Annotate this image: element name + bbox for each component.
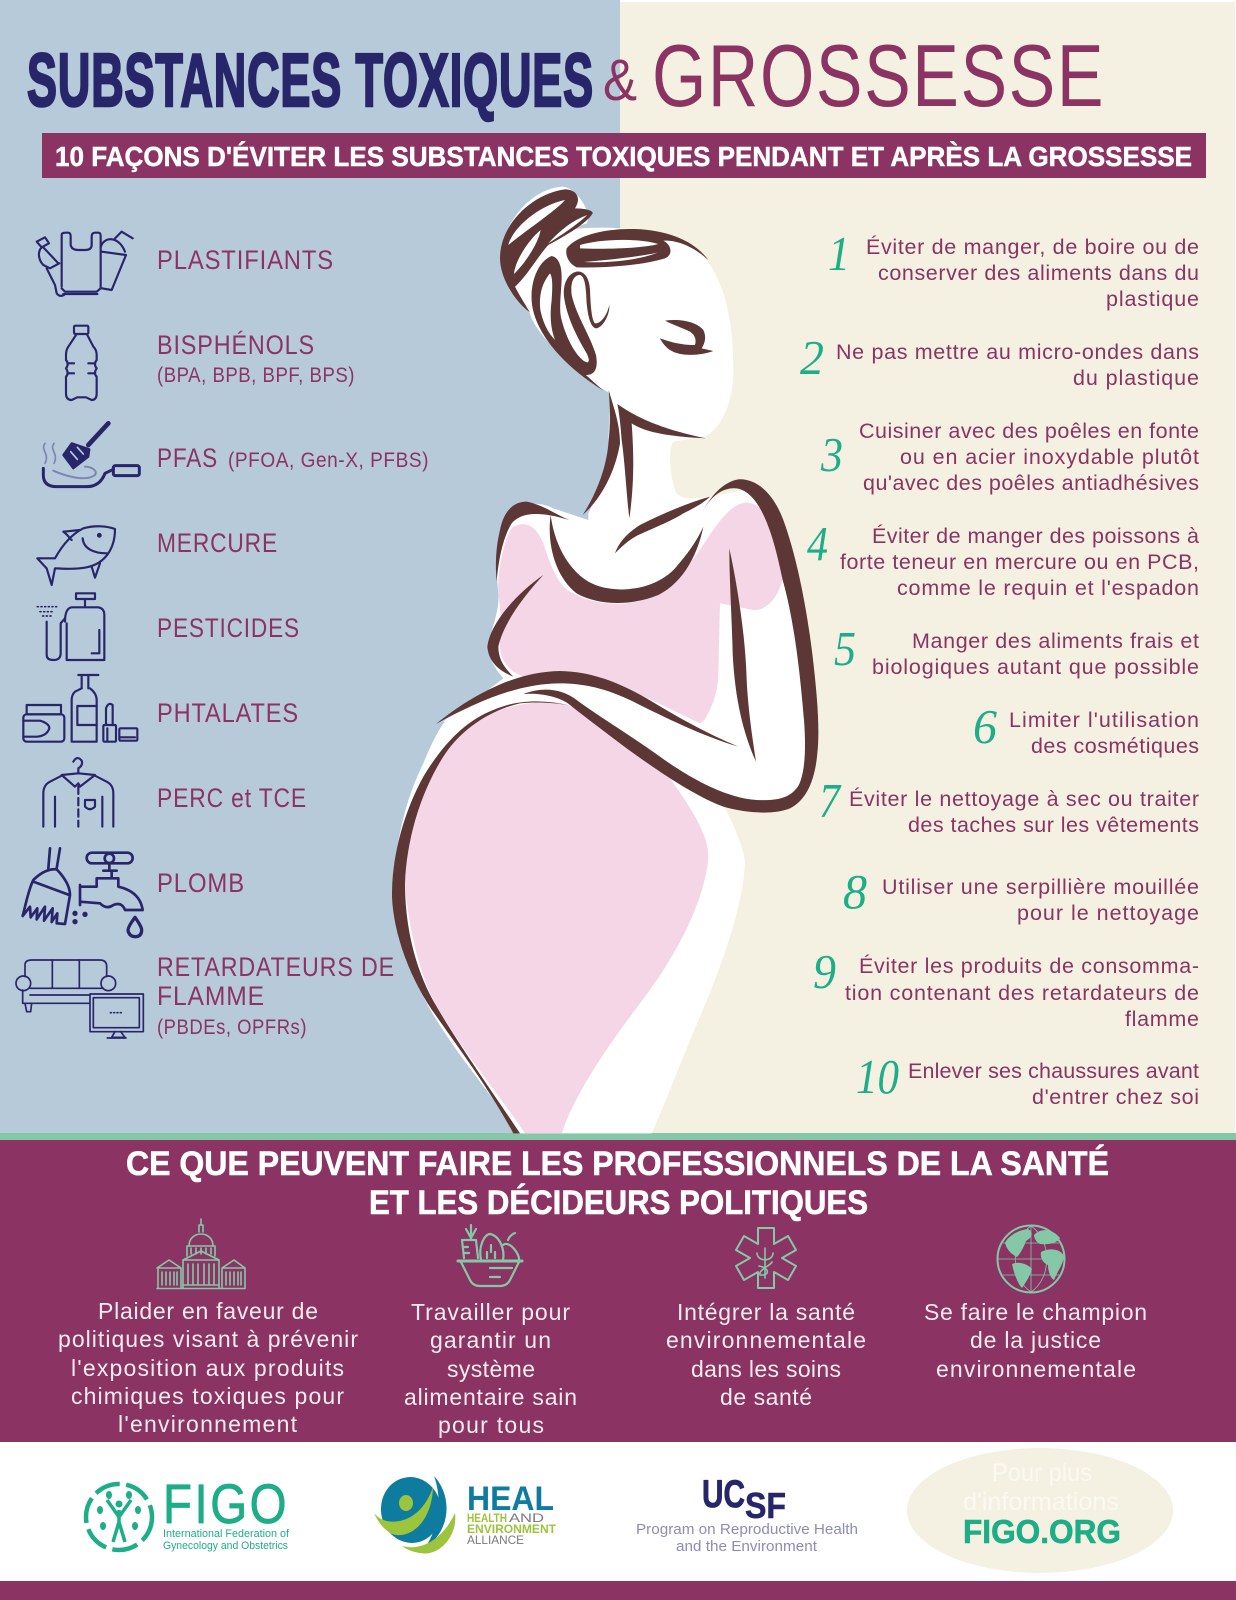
text: advocacy: l'environnement (118, 1411, 298, 1437)
callout: more information (907, 1448, 1173, 1573)
logo: ucsf: SF (745, 1485, 786, 1526)
text: advocacy: chimiques toxiques pour (71, 1383, 344, 1409)
logo: heal: HEAL (467, 1480, 554, 1518)
tip 7 (819, 773, 1199, 837)
list of toxic substances (16, 232, 429, 1039)
substance: bisphénols: (BPA, BPB, BPF, BPS) (157, 364, 355, 387)
text: food system: pour tous (438, 1412, 544, 1438)
text: integrate: de santé (720, 1384, 812, 1410)
action: advocacy (58, 1219, 358, 1437)
tip 6 (973, 699, 1199, 758)
tip 10: d'entrer chez soi (1032, 1085, 1199, 1109)
substance: retardateurs de flamme: (PBDEs, OPFRs) (157, 1016, 307, 1039)
substance: retardateurs de flamme: FLAMME (157, 981, 265, 1011)
tip 7: Éviter le nettoyage à sec ou traiter (849, 786, 1199, 811)
tip 2: 2 (800, 330, 824, 385)
text: integrate: dans les soins (691, 1356, 841, 1382)
logo: heal: HEALTH (467, 1511, 507, 1525)
tip 6: Limiter l'utilisation (1009, 708, 1199, 732)
text: justice: environnementale (936, 1356, 1136, 1382)
substance: phtalates: PHTALATES (157, 698, 299, 728)
substance: bisphénols: BISPHÉNOLS (157, 330, 315, 360)
callout: more information: FIGO.ORG (963, 1513, 1121, 1550)
substance: retardateurs de flamme (16, 952, 395, 1039)
icon: globe (998, 1226, 1064, 1292)
substance: perc et tce: PERC et TCE (157, 783, 307, 813)
substance: plomb: PLOMB (157, 868, 245, 898)
tip 3: qu'avec des poêles antiadhésives (863, 471, 1199, 495)
tip 1: 1 (828, 226, 850, 281)
substance: mercure (37, 526, 278, 585)
tip 7: des taches sur les vêtements (908, 813, 1199, 837)
tip 5: Manger des aliments frais et (912, 629, 1199, 653)
tip 5: biologiques autant que possible (872, 655, 1199, 679)
tip 10 (856, 1049, 1199, 1109)
text: justice: de la justice (970, 1327, 1101, 1353)
logo: figo: International Federation of (163, 1528, 290, 1540)
subtitle banner (42, 133, 1206, 178)
text: food system: garantir un (430, 1327, 551, 1353)
heading: health professionals and policy makers (126, 1145, 1109, 1222)
tip 1 (828, 226, 1199, 311)
logo: heal: ENVIRONMENT (467, 1522, 557, 1536)
tip 2: Ne pas mettre au micro-ondes dans (836, 340, 1199, 364)
list of 10 tips (800, 226, 1199, 1109)
text: integrate: Intégrer la santé (677, 1299, 855, 1325)
icon: food bowl (458, 1225, 522, 1286)
tip 8: 8 (843, 864, 867, 919)
tip 3: Cuisiner avec des poêles en fonte (859, 419, 1199, 443)
logo: ucsf: and the Environment (676, 1538, 818, 1555)
text: advocacy: l'exposition aux produits (71, 1355, 344, 1381)
tip 3: ou en acier inoxydable plutôt (900, 445, 1199, 469)
tip 9: Éviter les produits de consomma- (859, 953, 1199, 978)
tip 8: Utiliser une serpillière mouillée (882, 875, 1199, 899)
tip 10: 10 (856, 1049, 899, 1104)
tip 9: tion contenant des retardateurs de (845, 981, 1199, 1005)
tip 4: forte teneur en mercure ou en PCB, (840, 550, 1199, 574)
substance: bisphénols (66, 326, 355, 400)
logo: figo (86, 1472, 290, 1552)
text: justice: Se faire le champion (924, 1299, 1147, 1325)
icon: capitol building (157, 1219, 245, 1288)
tip 8: pour le nettoyage (1017, 901, 1199, 925)
logo: heal: AND (509, 1511, 544, 1525)
substance: perc et tce (43, 758, 307, 827)
text: food system (404, 1299, 577, 1438)
tip 3: 3 (820, 427, 843, 482)
tip 4 (807, 516, 1199, 600)
title: GROSSESSE (652, 26, 1105, 125)
text: advocacy: Plaider en faveur de (98, 1298, 318, 1324)
action: environmental justice (924, 1226, 1147, 1382)
tip 2 (800, 330, 1199, 390)
icon: star of life (736, 1228, 796, 1288)
text: advocacy: politiques visant à prévenir (58, 1326, 358, 1352)
tip 9: flamme (1125, 1007, 1199, 1031)
substance: phtalates (23, 675, 299, 742)
substance: plomb (23, 848, 245, 937)
tip 7: 7 (819, 773, 842, 828)
heading: health professionals and policy makers: ET LES DÉCIDEURS POLITIQUES (369, 1184, 868, 1222)
logo: figo: FIGO (163, 1472, 289, 1535)
text: food system: alimentaire sain (404, 1384, 577, 1410)
tip 6: des cosmétiques (1031, 734, 1199, 758)
tip 3 (820, 419, 1199, 495)
text: advocacy (58, 1298, 358, 1437)
action: integrate environmental health (666, 1228, 866, 1410)
tip 4: Éviter de manger des poissons à (872, 523, 1199, 548)
text: integrate: environnementale (666, 1327, 866, 1353)
logo: heal: ALLIANCE (467, 1533, 524, 1547)
tip 8 (843, 864, 1199, 925)
substance: pfas: (PFOA, Gen-X, PFBS) (228, 449, 429, 472)
text: food system: système (447, 1356, 535, 1382)
tip 9: 9 (813, 944, 836, 999)
logo: figo: Gynecology and Obstetrics (163, 1540, 288, 1552)
substance: pesticides: PESTICIDES (157, 613, 300, 643)
substance: pfas (43, 423, 429, 487)
tip 4: 4 (807, 516, 828, 571)
tip 10: Enlever ses chaussures avant (908, 1059, 1199, 1083)
text: integrate (666, 1299, 866, 1410)
tip 9 (813, 944, 1199, 1031)
action: healthy food system (404, 1225, 577, 1438)
tip 6: 6 (973, 699, 997, 754)
text: justice (924, 1299, 1147, 1382)
heading: health professionals and policy makers: CE QUE PEUVENT FAIRE LES PROFESSIONNELS DE LA SANTÉ (126, 1145, 1109, 1183)
tip 1: plastique (1106, 287, 1199, 311)
tip 4: comme le requin et l'espadon (897, 576, 1199, 600)
logo: ucsf: Program on Reproductive Health (636, 1521, 858, 1538)
title: SUBSTANCES TOXIQUES (27, 38, 594, 122)
text: food system: Travailler pour (411, 1299, 570, 1325)
tip 1: Éviter de manger, de boire ou de (866, 234, 1199, 259)
tip 1: conserver des aliments dans du (878, 261, 1199, 285)
substance: mercure: MERCURE (157, 528, 278, 558)
substance: plastifiants: PLASTIFIANTS (157, 245, 334, 275)
tip 5: 5 (834, 621, 856, 676)
pregnant woman illustration (392, 187, 818, 1133)
substance: plastifiants (37, 232, 334, 296)
logo: ucsf: UC (702, 1473, 745, 1516)
logo: ucsf (636, 1473, 858, 1555)
callout: more information: Pour plus (992, 1459, 1092, 1487)
logo: heal (374, 1473, 557, 1553)
substance: pesticides (37, 593, 300, 660)
substance: pfas: PFAS (157, 443, 218, 473)
callout: more information: d'informations (963, 1488, 1119, 1516)
substance: retardateurs de flamme: RETARDATEURS DE (157, 952, 395, 982)
tip 5 (834, 621, 1199, 679)
title: & (603, 48, 637, 113)
tip 2: du plastique (1073, 366, 1199, 390)
